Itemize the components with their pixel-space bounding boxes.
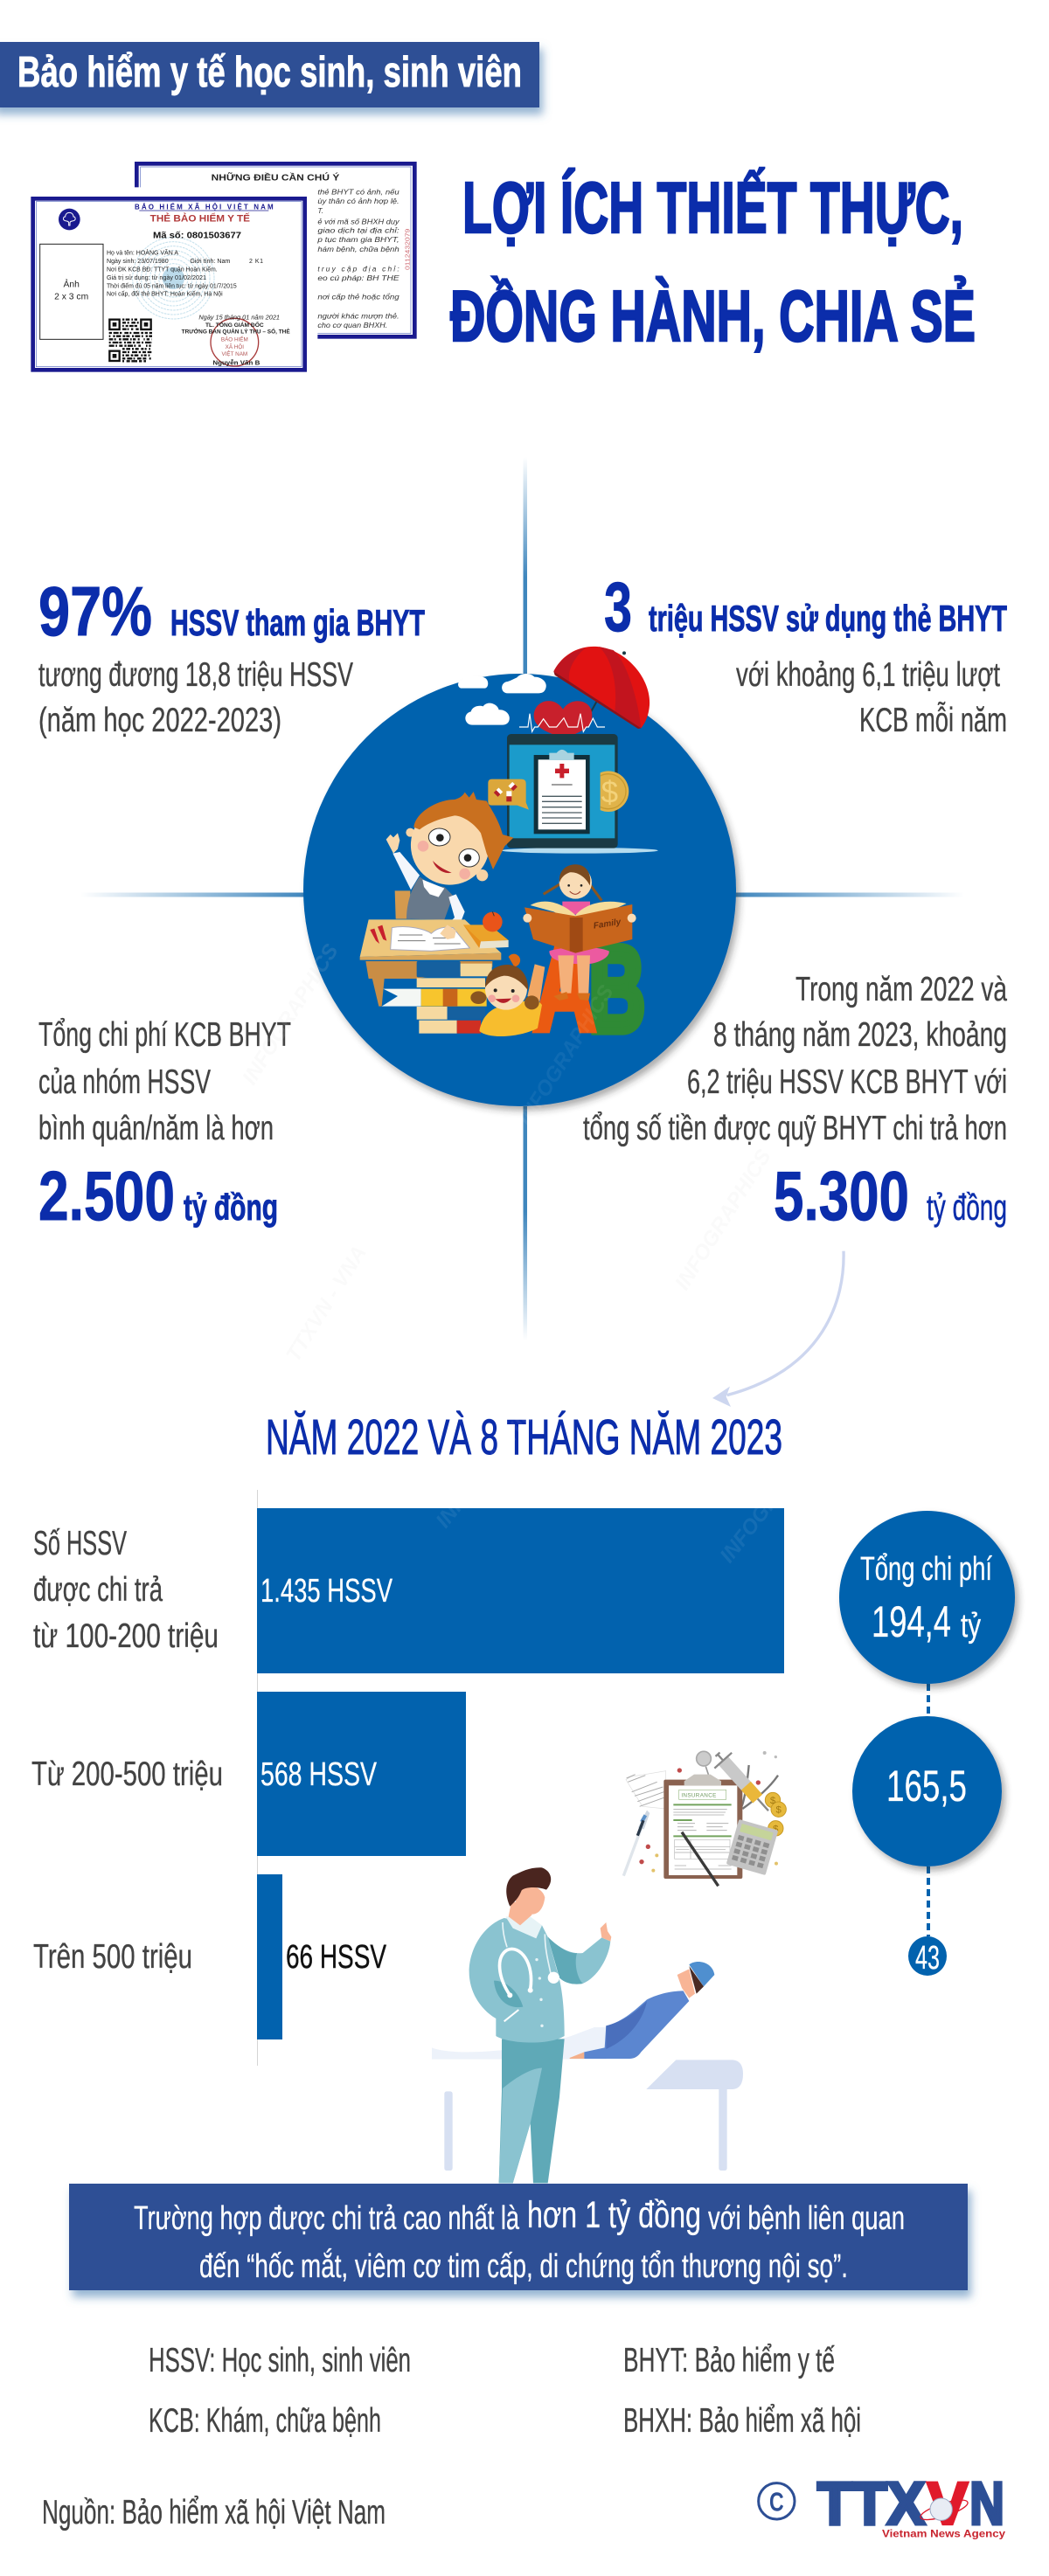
card front: Giá trị sử dụng: từ ngày 01/02/2021	[107, 274, 206, 281]
doctor	[469, 1867, 611, 2183]
desk	[360, 911, 509, 1007]
illustration: medical tablet and umbrella	[458, 647, 658, 854]
coin: $	[601, 775, 618, 809]
stat: 2.500 billion: tỷ đồng	[184, 1187, 278, 1228]
card front: Giới tính: Nam	[190, 259, 231, 265]
card back: hám bệnh, chữa bệnh	[317, 245, 399, 253]
card back: T.	[317, 206, 323, 215]
card back: 0112432079	[404, 229, 412, 270]
watermarks: TTXVN - VNA	[281, 1242, 372, 1366]
coin	[600, 771, 629, 812]
letters A and B: B	[588, 920, 645, 1057]
card front: TRƯỞNG BAN QUẢN LÝ THU – SỐ, THẺ	[182, 329, 290, 336]
card back: eo cú pháp: BH THE	[317, 274, 399, 282]
heart with pulse	[519, 701, 605, 735]
umbrella	[553, 647, 650, 729]
illustration: insurance paperwork: $	[770, 1796, 776, 1806]
central circle	[303, 674, 736, 1106]
logo: TTXVN	[759, 2470, 1005, 2539]
circle: 194,4: Tổng chi phí	[860, 1551, 992, 1588]
logo: TTXVN: C	[769, 2487, 784, 2517]
stat: 2.500 billion: của nhóm HSSV	[38, 1063, 211, 1101]
card front: Thời điểm đủ 05 năm liên tục: từ ngày 01/7/2015	[107, 282, 237, 289]
logo: TTXVN: Vietnam News Agency	[882, 2527, 1005, 2539]
stamp: XÃ HỘI	[226, 343, 244, 350]
QR code	[109, 320, 152, 361]
chart heading: NĂM 2022 VÀ 8 THÁNG NĂM 2023	[266, 1409, 782, 1465]
circle: 165,5: 165,5	[886, 1762, 967, 1811]
circle: 43: 43	[915, 1940, 940, 1977]
watermarks: INFOGRAPHICS	[670, 1146, 776, 1294]
card back: p tục tham gia BHYT,	[316, 235, 399, 244]
header banner: Bảo hiểm y tế học sinh, sinh viên	[17, 49, 522, 96]
stat: 97%: HSSV tham gia BHYT	[170, 602, 425, 643]
watermarks: INFOGRAPHICS	[431, 1391, 549, 1533]
bed	[432, 2027, 743, 2171]
circle: 165,5	[852, 1716, 1002, 1866]
bar: 100-200 million: Số HSSV	[33, 1525, 127, 1562]
tablet	[502, 734, 658, 854]
stat: 2.500 billion: bình quân/năm là hơn	[38, 1110, 274, 1147]
bar: 200-500 million: 568 HSSV	[261, 1756, 377, 1793]
stat: 3 million	[604, 568, 1007, 739]
glossary	[149, 2342, 861, 2440]
bar: over 500 million	[33, 1874, 386, 2039]
card back	[131, 163, 414, 342]
logo: TTXVN: N	[969, 2470, 1004, 2537]
illustration: insurance paperwork: $	[776, 1805, 782, 1816]
callout: với bệnh liên quan	[708, 2200, 905, 2237]
bar: 100-200 million: được chi trả	[33, 1571, 163, 1609]
card front: Nơi cấp, đổi thẻ BHYT: Hoàn Kiếm, Hà Nội	[107, 290, 223, 298]
stamp: VIỆT NAM	[221, 350, 247, 357]
fingerprint	[133, 238, 214, 319]
pill speech bubble	[488, 779, 529, 810]
stat: 3 million: 3	[604, 568, 632, 646]
stat: 97%: (năm học 2022-2023)	[38, 702, 281, 739]
illustration: insurance paperwork	[623, 1747, 786, 1886]
card front: Họ và tên: HOÀNG VĂN A	[107, 249, 178, 257]
card front: Ngày 15 tháng 01 năm 2021	[198, 314, 280, 322]
source: Nguồn: Bảo hiểm xã hội Việt Nam	[42, 2494, 386, 2531]
clouds	[458, 674, 546, 725]
bar: 200-500 million	[31, 1692, 466, 1856]
card back: NHỮNG ĐIỀU CẦN CHÚ Ý	[212, 172, 339, 184]
card front: Nguyễn Văn B	[212, 359, 261, 367]
girl reading: Family	[593, 918, 622, 931]
card front: THẺ BẢO HIỂM Y TẾ	[150, 212, 250, 224]
card back: nơi cấp thẻ hoặc tổng	[317, 293, 399, 301]
card front: Ảnh	[63, 278, 80, 289]
stat: 2.500 billion: Tổng chi phí KCB BHYT	[38, 1016, 291, 1054]
stamp: BẢO HIỂM	[221, 335, 248, 343]
card front: BẢO HIỂM XÃ HỘI VIỆT NAM	[135, 203, 274, 211]
stat: 5.300 billion	[583, 971, 1007, 1235]
card front: Nơi ĐK KCB BĐ: TTYT quận Hoàn Kiếm.	[107, 266, 218, 274]
watermarks: INFOGRAPHICS	[715, 1426, 833, 1568]
bar: over 500 million: Trên 500 triệu	[33, 1938, 192, 1976]
letters A and B: A	[533, 918, 596, 1056]
bar: 100-200 million	[33, 1508, 784, 1673]
girl lying on books	[470, 954, 545, 1036]
main title	[450, 167, 976, 357]
girl reading	[523, 864, 636, 1001]
arrow	[712, 1251, 844, 1407]
watermarks: INFOGRAPHICS	[513, 981, 619, 1130]
card front: 2 x 3 cm	[54, 293, 88, 302]
stat: 97%	[38, 572, 425, 739]
card back: ùy thân có ảnh hợp lệ.	[317, 197, 399, 205]
stat: 5.300 billion: tỷ đồng	[927, 1187, 1007, 1228]
connector lines	[80, 457, 964, 1340]
card back: người khác mượn thẻ.	[317, 312, 399, 321]
card back: ẻ với mã số BHXH duy	[317, 217, 400, 225]
stat: 5.300 billion: 5.300	[774, 1157, 909, 1235]
circle: 194,4: 194,4	[872, 1597, 951, 1646]
card front: Mã số: 0801503677	[153, 232, 241, 241]
patient	[570, 1962, 714, 2059]
logo: TTXVN: V	[927, 2470, 969, 2537]
watermarks	[238, 940, 833, 1568]
card back: truy cập địa chỉ:	[317, 264, 399, 273]
glossary: BHYT: Bảo hiểm y tế	[623, 2342, 835, 2379]
illustration: insurance paperwork: INSURANCE	[681, 1793, 716, 1799]
card back: thẻ BHYT có ảnh, nếu	[317, 187, 399, 196]
circle: 194,4	[839, 1511, 1015, 1684]
card back: cho cơ quan BHXH.	[317, 321, 387, 329]
card front: 2 K1	[249, 259, 263, 265]
card back: giao dịch tại địa chỉ:	[317, 226, 399, 235]
logo	[59, 209, 80, 230]
bar chart	[31, 1490, 784, 2066]
callout: Trường hợp được chi trả cao nhất là	[134, 2200, 520, 2237]
header banner	[0, 42, 539, 107]
stat: 2.500 billion	[38, 1016, 291, 1235]
bar: 100-200 million: từ 100-200 triệu	[33, 1617, 219, 1655]
glossary: BHXH: Bảo hiểm xã hội	[623, 2402, 861, 2440]
bar: 200-500 million: Từ 200-500 triệu	[31, 1755, 223, 1793]
illustration: health insurance card	[33, 163, 414, 370]
book stack	[417, 961, 492, 1034]
stat: 2.500 billion: 2.500	[38, 1157, 175, 1235]
callout	[69, 2184, 968, 2290]
card front: Ngày sinh: 23/07/1980	[107, 259, 169, 265]
circle: 43	[908, 1936, 947, 1977]
glossary: KCB: Khám, chữa bệnh	[149, 2402, 381, 2440]
cost circles	[839, 1511, 1015, 1977]
bar: 100-200 million: 1.435 HSSV	[261, 1573, 393, 1610]
illustration: students with books	[360, 852, 645, 1057]
stat: 97%: tương đương 18,8 triệu HSSV	[38, 656, 353, 694]
chair	[395, 890, 410, 919]
callout: hơn 1 tỷ đồng	[527, 2194, 701, 2236]
card front: TL. TỔNG GIÁM ĐỐC	[205, 322, 264, 329]
stamp	[211, 318, 259, 366]
circle: 194,4: tỷ	[961, 1608, 981, 1645]
logo: TTXVN: TTX	[817, 2470, 925, 2537]
illustration: boy head	[386, 792, 513, 894]
illustration: doctor and patient	[432, 1867, 743, 2183]
card front	[33, 198, 305, 370]
bar: over 500 million: 66 HSSV	[286, 1939, 386, 1976]
stat: 97%: 97%	[38, 572, 152, 650]
illustration: insurance paperwork: $	[773, 1824, 779, 1834]
glossary: HSSV: Học sinh, sinh viên	[149, 2342, 411, 2379]
boy body	[393, 852, 465, 931]
watermarks: INFOGRAPHICS	[238, 940, 344, 1089]
